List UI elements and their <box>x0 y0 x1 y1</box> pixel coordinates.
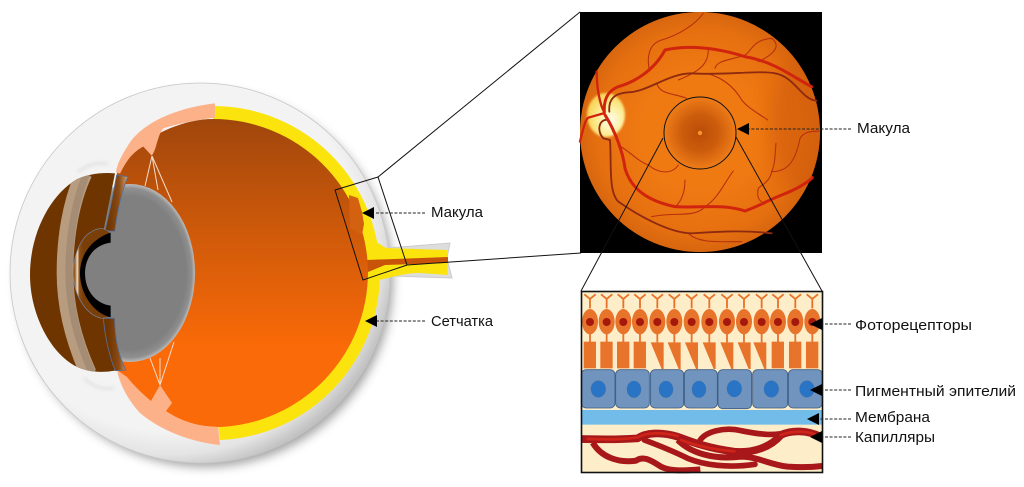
label: membrane: Мембрана <box>855 409 931 426</box>
thin vessels <box>618 13 820 242</box>
macula ring <box>664 97 736 169</box>
label: photoreceptors: Фоторецепторы <box>855 317 972 334</box>
darker right patch <box>769 58 820 196</box>
vessels <box>580 13 820 242</box>
optic nerve sheath <box>388 243 452 278</box>
label: macula (eye) <box>362 204 484 221</box>
peach ciliary bottom <box>117 370 220 445</box>
membrane <box>582 410 823 425</box>
dark veins <box>599 72 817 233</box>
eye cross-section <box>10 83 452 467</box>
label: pigment epithelium: Пигментный эпителий <box>855 383 1016 400</box>
label: macula (fundus) <box>737 120 911 137</box>
peach ciliary top <box>116 103 215 174</box>
cornea and iris <box>30 173 128 373</box>
macula box <box>335 177 407 280</box>
lens <box>65 184 195 362</box>
faint corneal reflections <box>78 163 114 389</box>
lower iris <box>103 318 126 371</box>
anterior chamber <box>30 173 115 372</box>
lines to cell panel <box>581 137 822 291</box>
zonule fibres <box>145 156 174 385</box>
black crescent <box>80 233 111 317</box>
black square <box>580 12 822 253</box>
tan band <box>65 173 92 373</box>
label: capillaries: Капилляры <box>855 429 935 446</box>
optic nerve <box>362 240 448 282</box>
label: membrane <box>807 409 931 426</box>
red arteries <box>580 47 812 211</box>
upper iris <box>105 175 128 231</box>
eye shadow <box>17 91 393 467</box>
panel border <box>582 292 822 472</box>
label: retina: Сетчатка <box>431 313 494 330</box>
label: macula (eye): Макула <box>431 204 484 221</box>
inner eye body <box>117 119 368 427</box>
label: capillaries <box>810 429 935 446</box>
zoom lines <box>378 12 581 265</box>
pigment epithelium cells <box>581 370 822 409</box>
label: retina <box>365 313 494 330</box>
panel background <box>582 292 822 472</box>
fovea <box>698 131 702 135</box>
pupil rim <box>73 228 111 318</box>
photoreceptors <box>582 294 820 369</box>
front lens <box>85 232 118 319</box>
sclera <box>10 83 390 463</box>
label: photoreceptors <box>810 317 972 334</box>
capillaries <box>581 429 822 470</box>
nuclei <box>591 380 814 398</box>
fundus panel <box>580 12 840 253</box>
optic disc <box>587 93 625 137</box>
retinal layers panel <box>581 292 823 472</box>
retina disc <box>580 12 820 252</box>
label: macula (fundus): Макула <box>857 120 911 137</box>
macula bump <box>349 195 364 235</box>
retina: yellow layer <box>213 106 380 440</box>
